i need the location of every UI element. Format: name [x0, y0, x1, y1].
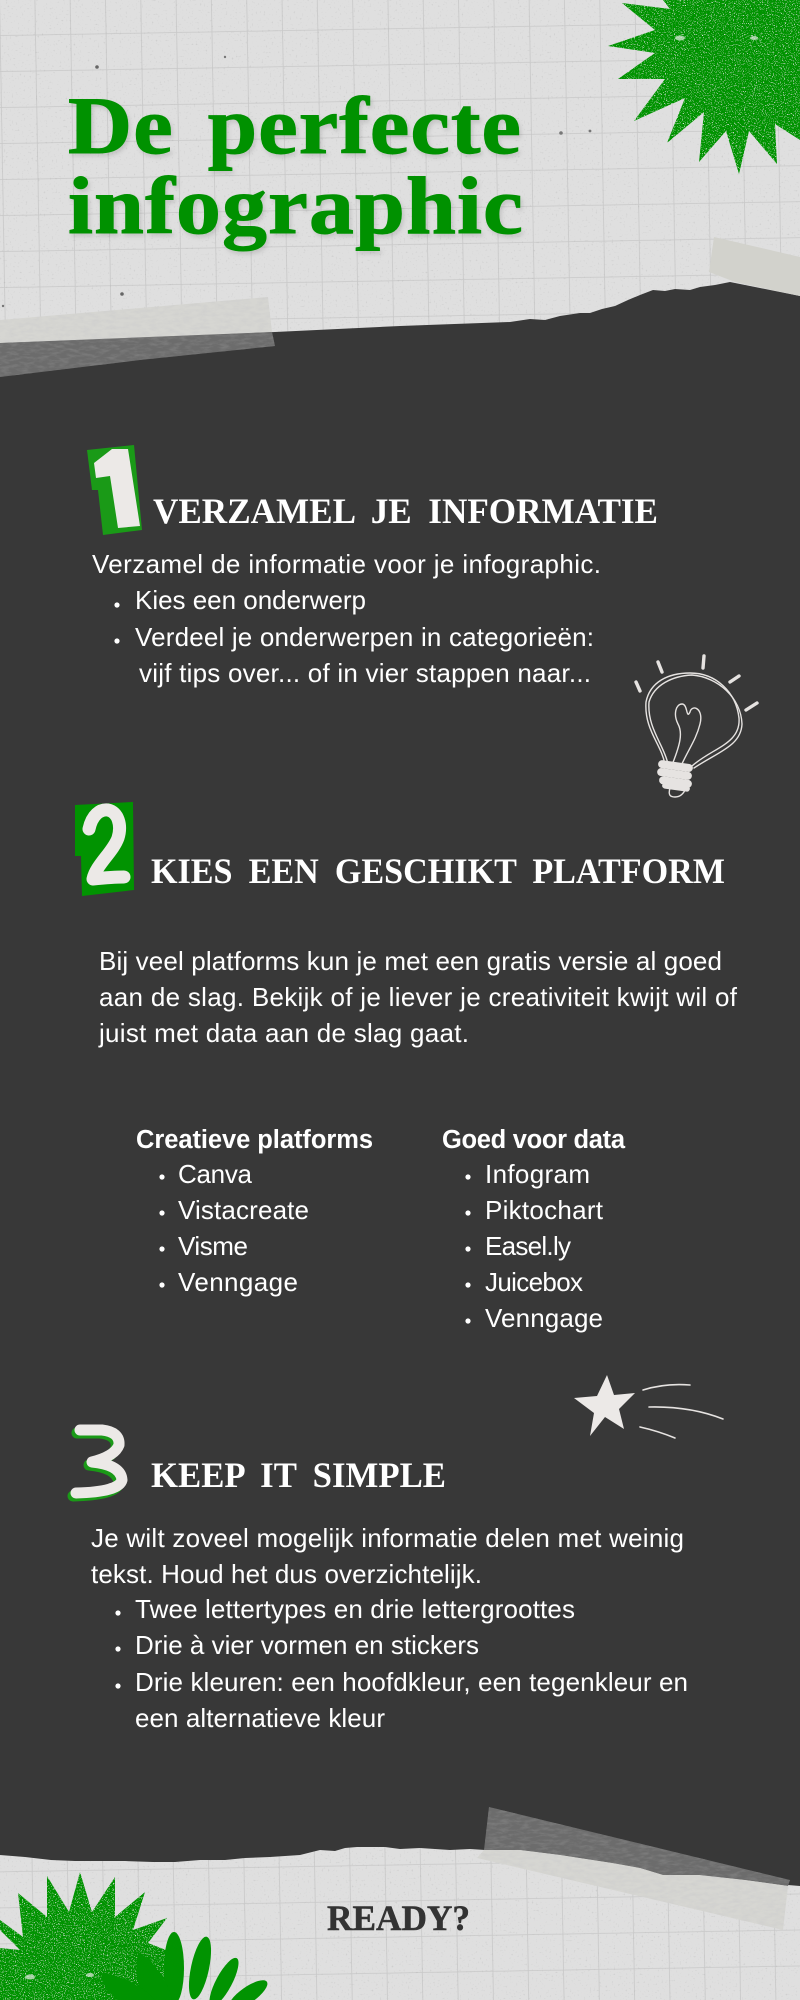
section 1 [87, 445, 757, 797]
list: goed voor data: Goed voor data [442, 1126, 626, 1154]
heading 2: KIES EEN GESCHIKT PLATFORM [151, 851, 725, 891]
text block 1: Verdeel je onderwerpen in categorieën: [135, 622, 594, 652]
list: creatieve platforms: Visme [178, 1231, 248, 1261]
text block 3 [91, 1523, 688, 1733]
title: infographic [68, 160, 524, 251]
list: creatieve platforms: Venngage [178, 1267, 298, 1297]
heading 3: KEEP IT SIMPLE [151, 1455, 446, 1495]
title: De perfecte [68, 80, 522, 171]
list: creatieve platforms: Creatieve platforms [136, 1126, 373, 1154]
list: goed voor data: Juicebox [485, 1267, 583, 1297]
icon: green starburst top right [608, 0, 800, 174]
text block 3: een alternatieve kleur [135, 1703, 385, 1733]
list: goed voor data: Venngage [485, 1303, 603, 1333]
number 3 badge [73, 1430, 122, 1496]
list: creatieve platforms: Vistacreate [178, 1195, 309, 1225]
icon: green starburst bottom left [0, 1872, 170, 2000]
list: creatieve platforms [136, 1126, 373, 1297]
text block 2: juist met data aan de slag gaat. [98, 1018, 469, 1048]
list: goed voor data [442, 1126, 626, 1333]
footer text: READY? [327, 1898, 470, 1938]
section 3 [73, 1430, 688, 1733]
text block 3: tekst. Houd het dus overzichtelijk. [91, 1559, 482, 1589]
list: goed voor data: Piktochart [485, 1195, 604, 1225]
text block 1: vijf tips over... of in vier stappen naar... [139, 658, 591, 688]
list: goed voor data: Infogram [485, 1159, 590, 1189]
number 2 badge [75, 802, 134, 896]
icon: shooting star [574, 1375, 723, 1438]
text block 1: Verzamel de informatie voor je infographic. [92, 549, 601, 579]
number 1 badge [87, 445, 142, 535]
text block 1: Kies een onderwerp [135, 585, 366, 615]
tape: bottom right [477, 1807, 790, 1930]
list: creatieve platforms: Canva [178, 1159, 253, 1189]
icon: green leaves [102, 1932, 271, 2000]
text block 1 [92, 549, 601, 688]
text block 3: Drie à vier vormen en stickers [135, 1630, 479, 1660]
text block 3: Twee lettertypes en drie lettergroottes [135, 1594, 575, 1624]
text block 3: Drie kleuren: een hoofdkleur, een tegenkleur en [135, 1667, 688, 1697]
tape: top left [0, 297, 275, 377]
section 2 [75, 802, 738, 1333]
text block 2: aan de slag. Bekijk of je liever je creativiteit kwijt wil of [99, 982, 738, 1012]
list: goed voor data: Easel.ly [485, 1231, 571, 1261]
heading 1: VERZAMEL JE INFORMATIE [153, 491, 658, 531]
tape: top right [709, 237, 800, 296]
title [68, 80, 524, 251]
text block 3: Je wilt zoveel mogelijk informatie delen met weinig [91, 1523, 684, 1553]
text block 2: Bij veel platforms kun je met een gratis versie al goed [99, 946, 722, 976]
text block 2 [98, 946, 738, 1048]
icon: light bulb [636, 656, 757, 797]
